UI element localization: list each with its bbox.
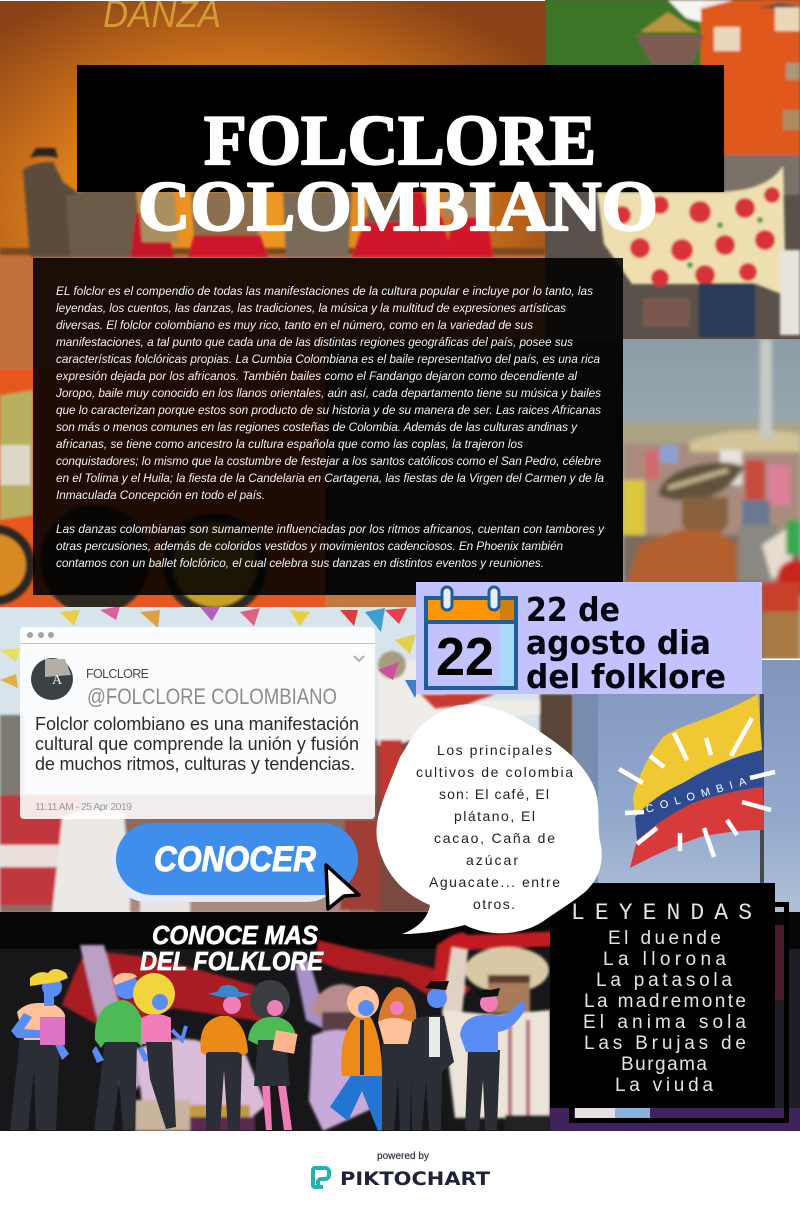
body paragraphs: EL folclor es el compendio de todas las manifestaciones de la cultura popular e incluye por lo tanto, las xyxy=(56,284,593,298)
icon: calendar: 22 xyxy=(436,627,494,687)
leyendas items: La patasola xyxy=(596,970,732,991)
photo: colonial street and strawberry skirt xyxy=(545,0,800,339)
bubble text xyxy=(416,742,573,912)
body paragraphs: otras percusiones, además de coloridos vestidos y movimientos cadenciosos. En Phoenix también xyxy=(56,539,563,553)
icon: calendar xyxy=(426,587,516,688)
leyendas heading: LEYENDAS xyxy=(571,900,752,926)
heading: conoce mas del folklore: CONOCE MAS xyxy=(152,920,319,950)
panel: leyendas list xyxy=(550,883,786,1120)
bubble text: azúcar xyxy=(466,852,518,868)
account name: FOLCLORE xyxy=(86,667,149,681)
person 9 xyxy=(460,988,526,1130)
title xyxy=(138,102,658,246)
body paragraphs: Joropo, baile muy conocido en los llanos orientales, aún así, cada departamento tiene su música y bailes xyxy=(55,386,601,400)
body paragraphs: Inmaculada Concepción en todo el país. xyxy=(56,488,265,502)
title background panel xyxy=(77,65,724,192)
body paragraphs: contamos con un ballet folclórico, el cual celebra sus danzas en distintos eventos y reuniones. xyxy=(56,556,544,570)
photo: food dishes on orange table xyxy=(0,370,325,617)
leyendas items: La madremonte xyxy=(584,991,746,1012)
bubble text: otros. xyxy=(473,896,515,912)
leyendas items: El anima sola xyxy=(583,1012,746,1033)
photo: mid dark dish strip xyxy=(325,339,623,607)
panel: date callout xyxy=(416,582,762,696)
bubble text: son: El café, El xyxy=(439,786,549,802)
title: FOLCLORE xyxy=(204,102,596,180)
leyendas items xyxy=(583,928,746,1096)
tweet body: Folclor colombiano es una manifestación xyxy=(35,714,359,734)
button: conocer: CONOCER xyxy=(154,840,317,879)
tweet body: de muchos ritmos, culturas y tendencias. xyxy=(35,754,355,774)
body paragraphs xyxy=(55,284,605,570)
photo: stage dancers with orange backdrop xyxy=(0,1,545,370)
tweet body: cultural que comprende la unión y fusión xyxy=(35,734,359,754)
person 8 xyxy=(403,981,454,1130)
body paragraphs: Las danzas colombianas son sumamente influenciadas por los ritmos africanos, cuentan con tambores y xyxy=(56,522,605,536)
tweet body xyxy=(35,714,359,774)
button: conocer xyxy=(111,823,358,902)
body paragraphs: conquistadores; lo mismo que la costumbre de festejar a los santos católicos como el San Pedro, célebre xyxy=(56,454,601,468)
photo: national flag against the sky xyxy=(573,660,800,915)
footer: powered by piktochart: PIKTOCHART xyxy=(340,1168,490,1190)
person 7 xyxy=(378,987,416,1130)
bubble text: Aguacate... entre xyxy=(429,874,560,890)
date heading: del folklore xyxy=(526,657,726,696)
leyendas items: El duende xyxy=(608,928,721,949)
flag stripes xyxy=(630,694,764,868)
person 2 xyxy=(92,973,150,1130)
heading: conoce mas del folklore xyxy=(140,920,324,976)
body paragraphs: en el Tolima y el Huila; la fiesta de la Candelaria en Cartagena, las fiestas de la Virgen del Carmen y de la xyxy=(56,471,604,485)
icon: cursor arrow xyxy=(326,865,359,909)
body paragraphs: manifestaciones, a tal punto que cada una de las distintas regiones geográficas del país, posee sus xyxy=(56,335,573,349)
avatar xyxy=(31,658,73,700)
icon: burst badge xyxy=(619,718,775,857)
person 4 xyxy=(200,985,251,1130)
callout: crops speech bubble xyxy=(377,704,602,934)
body paragraphs: expresión dejada por los africanos. También bailes como el Fandango dejaron como decendiente al xyxy=(56,369,577,383)
body paragraphs: africanas, se tiene como ancestro la cultura española que como las coplas, la trajeron los xyxy=(56,437,523,451)
avatar: A xyxy=(52,673,63,688)
window dots xyxy=(27,632,54,638)
footer: powered by piktochart: powered by xyxy=(377,1151,429,1162)
leyendas items: Burgama xyxy=(621,1054,707,1075)
panel: introductory text xyxy=(33,258,623,595)
date heading: 22 de xyxy=(526,590,620,629)
footer: powered by piktochart xyxy=(0,1131,800,1211)
heading: conoce mas del folklore: DEL FOLKLORE xyxy=(140,946,324,976)
icon: burst badge: COLOMBIA xyxy=(645,776,748,816)
body paragraphs: características folclóricas propias. La Cumbia Colombiana es el baile representativo del país, es una rica xyxy=(56,352,600,366)
timestamp: 11:11 AM - 25 Apr 2019 xyxy=(35,801,132,813)
person 3 xyxy=(133,973,186,1129)
bubble text: plátano, El xyxy=(454,808,535,824)
bubble text: cultivos de colombia xyxy=(416,764,573,780)
leyendas items: Las Brujas de xyxy=(584,1033,746,1054)
body paragraphs: son más o menos comunes en las regiones costeñas de Colombia. Además de las culturas andinas y xyxy=(56,420,578,434)
title: COLOMBIANO xyxy=(138,168,658,246)
bubble text: Los principales xyxy=(437,742,552,758)
photo: crowd with vueltiao hat xyxy=(623,339,800,660)
photo: festival dancers with bunting xyxy=(0,606,573,913)
handle: @FOLCLORE COLOMBIANO xyxy=(87,684,337,709)
leyendas items: La viuda xyxy=(615,1075,713,1096)
date heading xyxy=(526,590,726,696)
person 5 xyxy=(248,980,298,1130)
body paragraphs: que lo caracterizan porque estos son producto de su historia y de su manera de ser. Las raices Africanas xyxy=(56,403,601,417)
person 6 xyxy=(330,986,390,1131)
date heading: agosto dia xyxy=(526,623,711,662)
panel: tweet card xyxy=(20,627,375,819)
person 1 xyxy=(10,969,69,1130)
leyendas items: La llorona xyxy=(603,949,726,970)
body paragraphs: leyendas, los cuentos, las danzas, las tradiciones, la música y la multitud de expresiones artísticas xyxy=(56,301,566,315)
top white edge xyxy=(0,0,545,1)
chevron xyxy=(354,656,364,661)
photo: stage finale with red banners xyxy=(0,912,800,1131)
icon: piktochart logo xyxy=(313,1168,329,1187)
bubble text: cacao, Caña de xyxy=(434,830,555,846)
body paragraphs: diversas. El folclor colombiano es muy rico, tanto en el número, como en la variedad de sus xyxy=(56,318,533,332)
illustration: group of people xyxy=(10,969,526,1131)
